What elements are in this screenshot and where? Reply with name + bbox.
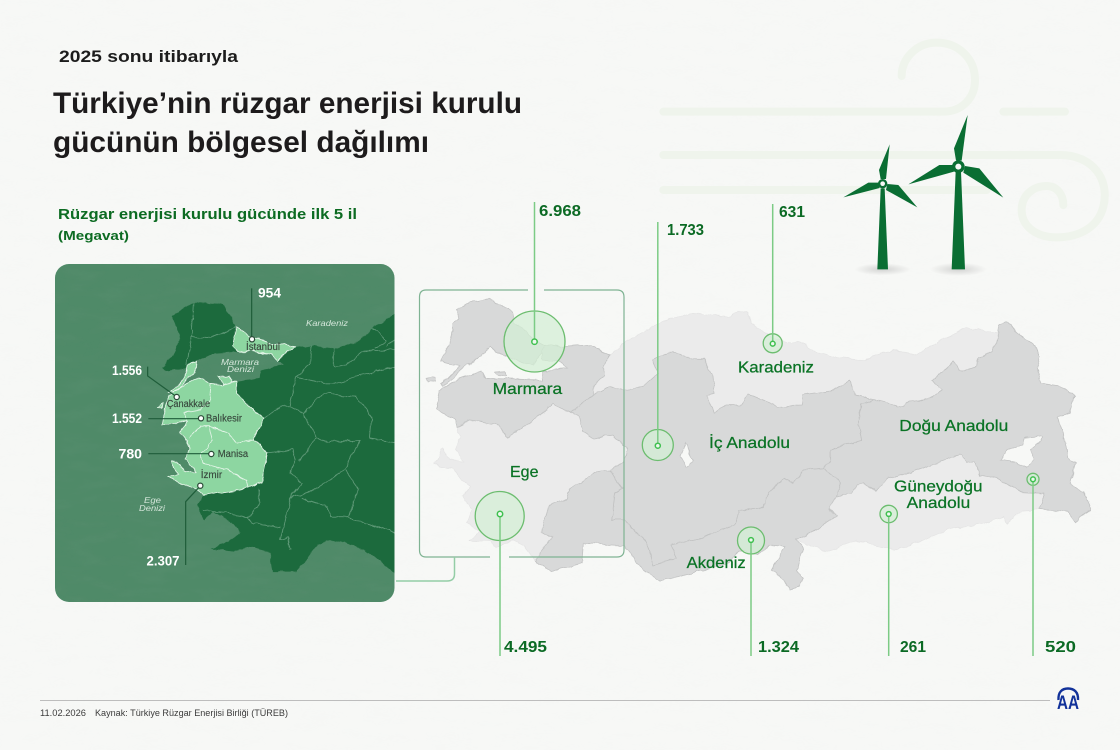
province names — [167, 340, 280, 481]
highlighted provinces — [158, 327, 297, 496]
date note: 2025 sonu itibarıyla — [59, 47, 239, 66]
title: gücünün bölgesel dağılımı — [53, 126, 429, 159]
sea labels — [139, 318, 349, 513]
title: Türkiye’nin rüzgar enerjisi kurulu — [53, 87, 522, 120]
province names: Çanakkale — [167, 399, 211, 410]
icon: AA logo: AA — [1057, 693, 1079, 714]
province borders — [187, 303, 395, 550]
callout: Marmara: Marmara — [493, 381, 562, 398]
region: Marmara — [425, 298, 610, 437]
panel: top 5 provinces map — [55, 264, 407, 602]
callout: Karadeniz: 631 — [779, 204, 805, 221]
icon: AA logo — [1057, 688, 1079, 714]
province values — [112, 284, 281, 568]
province values: 2.307 — [146, 552, 180, 568]
callout: Güneydoğu Anadolu: Anadolu — [907, 495, 970, 512]
callout: Marmara — [493, 202, 581, 398]
callout: Güneydoğu Anadolu: Güneydoğu — [894, 479, 982, 496]
sea labels: Denizi — [139, 503, 166, 513]
callout: Ege: 4.495 — [504, 639, 547, 656]
callout: Akdeniz: 1.324 — [758, 639, 799, 656]
subheading — [58, 206, 357, 243]
callout: Güneydoğu Anadolu: 261 — [900, 639, 926, 656]
footer: Kaynak: Türkiye Rüzgar Enerjisi Birliği (TÜREB) — [95, 708, 288, 718]
callout: İç Anadolu: 1.733 — [667, 222, 704, 239]
province names: İstanbul — [246, 340, 280, 353]
region: Güneydoğu Anadolu — [796, 455, 1045, 552]
lakes — [681, 436, 1044, 468]
province leaders — [148, 288, 252, 565]
bracket: Marmara and Ege — [396, 290, 624, 581]
province dots — [174, 337, 255, 488]
callout: Güneydoğu Anadolu — [880, 479, 982, 656]
callout: Doğu Anadolu: Doğu Anadolu — [899, 418, 1008, 435]
footer: 11.02.2026 — [40, 708, 86, 718]
callout: Doğu Anadolu: 520 — [1045, 639, 1076, 656]
province names: İzmir — [201, 468, 223, 481]
dark land — [162, 302, 407, 583]
province values: 954 — [258, 284, 281, 300]
province values: 1.552 — [112, 410, 142, 426]
map: Türkiye regions — [425, 298, 1092, 590]
callout: İç Anadolu — [642, 222, 790, 460]
title — [53, 87, 522, 159]
region: Doğu Anadolu — [823, 322, 1092, 523]
region: Karadeniz — [593, 312, 1000, 412]
callout: Akdeniz: Akdeniz — [687, 555, 746, 572]
region: Akdeniz — [535, 468, 840, 590]
sea labels: Karadeniz — [306, 318, 349, 328]
province names: Balıkesir — [206, 414, 243, 424]
subheading: (Megavat) — [58, 229, 129, 243]
sea labels: Ege — [144, 495, 161, 505]
callout: Akdeniz — [687, 527, 799, 656]
sea labels: Denizi — [227, 364, 255, 374]
icon: wind turbines — [843, 115, 1003, 276]
province values: 780 — [118, 446, 142, 462]
callout: Marmara: 6.968 — [539, 203, 581, 220]
region: Ege — [435, 403, 627, 560]
callout: İç Anadolu: İç Anadolu — [709, 433, 790, 452]
callout: Doğu Anadolu — [899, 418, 1076, 656]
footer — [40, 700, 1050, 718]
province values: 1.556 — [112, 362, 142, 378]
region: İç Anadolu — [570, 352, 873, 565]
callout: Karadeniz: Karadeniz — [738, 360, 814, 377]
subheading: Rüzgar enerjisi kurulu gücünde ilk 5 il — [58, 206, 357, 223]
sea labels: Marmara — [221, 357, 259, 367]
wind swirl lines — [663, 43, 1105, 237]
callout: Ege: Ege — [510, 464, 539, 481]
province names: Manisa — [218, 449, 249, 460]
callout: Ege — [475, 464, 547, 656]
callout: Karadeniz — [738, 204, 814, 377]
